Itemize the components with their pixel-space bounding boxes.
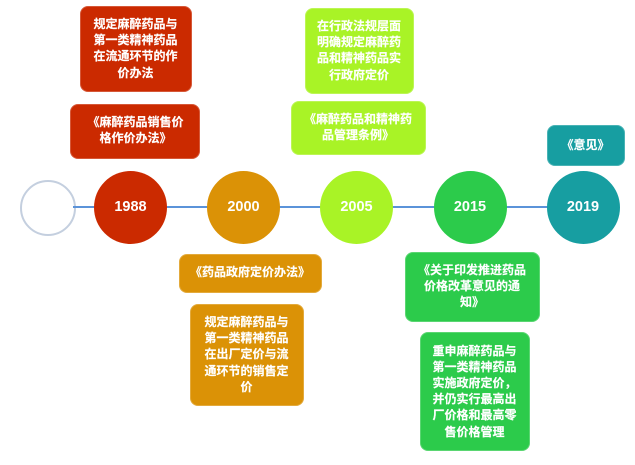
2000 description (190, 304, 304, 406)
1988 description: 价办法 (117, 66, 154, 80)
2015 description: 实施政府定价， (432, 376, 516, 390)
start circle (20, 180, 76, 236)
1988 description (80, 6, 192, 92)
2000 description: 规定麻醉药品与 (204, 315, 288, 329)
2005 description: 在行政法规层面 (317, 19, 401, 33)
2005 policy title: 《麻醉药品和精神药 (304, 112, 412, 126)
1988 description: 第一类精神药品 (93, 33, 178, 47)
2019 policy title (546, 125, 624, 166)
2005 description: 品和精神药品实 (317, 51, 401, 65)
year node: 2019: 2019 (567, 198, 599, 214)
2015 policy title: 知》 (460, 295, 484, 309)
year node: 2005 (320, 170, 393, 244)
2000 description: 在出厂定价与流 (204, 347, 288, 361)
year node: 2015 (434, 170, 506, 244)
2015 description: 第一类精神药品 (432, 360, 516, 374)
2005 description: 行政府定价 (329, 68, 389, 82)
1988 description: 规定麻醉药品与 (93, 17, 178, 31)
2005 description (304, 8, 414, 94)
1988 policy title: 格作价办法》 (99, 131, 172, 145)
2015 policy title: 《关于印发推进药品 (418, 263, 526, 277)
2015 policy title: 价格改革意见的通 (424, 279, 520, 293)
year node: 2005: 2005 (340, 198, 373, 214)
2000 description: 第一类精神药品 (204, 331, 288, 345)
1988 policy title (70, 104, 200, 158)
timeline axis (73, 206, 563, 208)
2000 policy title (178, 254, 322, 292)
year node: 2015: 2015 (454, 198, 486, 214)
1988 description: 在流通环节的作 (93, 49, 178, 63)
year node: 2000 (207, 170, 280, 244)
2019 policy title: 《意见》 (561, 138, 610, 152)
2015 description (420, 332, 530, 450)
2015 description: 并仍实行最高出 (432, 392, 516, 406)
2000 policy title: 《药品政府定价办法》 (190, 265, 310, 279)
year node: 1988: 1988 (114, 198, 147, 214)
2015 policy title (404, 252, 540, 322)
2015 description: 售价格管理 (444, 425, 504, 439)
2005 description: 明确规定麻醉药 (317, 35, 401, 49)
year node: 2019 (546, 170, 620, 244)
2015 description: 厂价格和最高零 (432, 408, 516, 422)
2005 policy title: 品管理条例》 (322, 128, 394, 142)
1988 policy title: 《麻醉药品销售价 (87, 115, 184, 129)
2000 description: 价 (240, 380, 252, 394)
2000 description: 通环节的销售定 (204, 364, 288, 378)
2005 policy title (290, 100, 426, 154)
2015 description: 重申麻醉药品与 (432, 344, 516, 358)
year node: 2000: 2000 (227, 198, 260, 214)
year node: 1988 (94, 170, 167, 244)
